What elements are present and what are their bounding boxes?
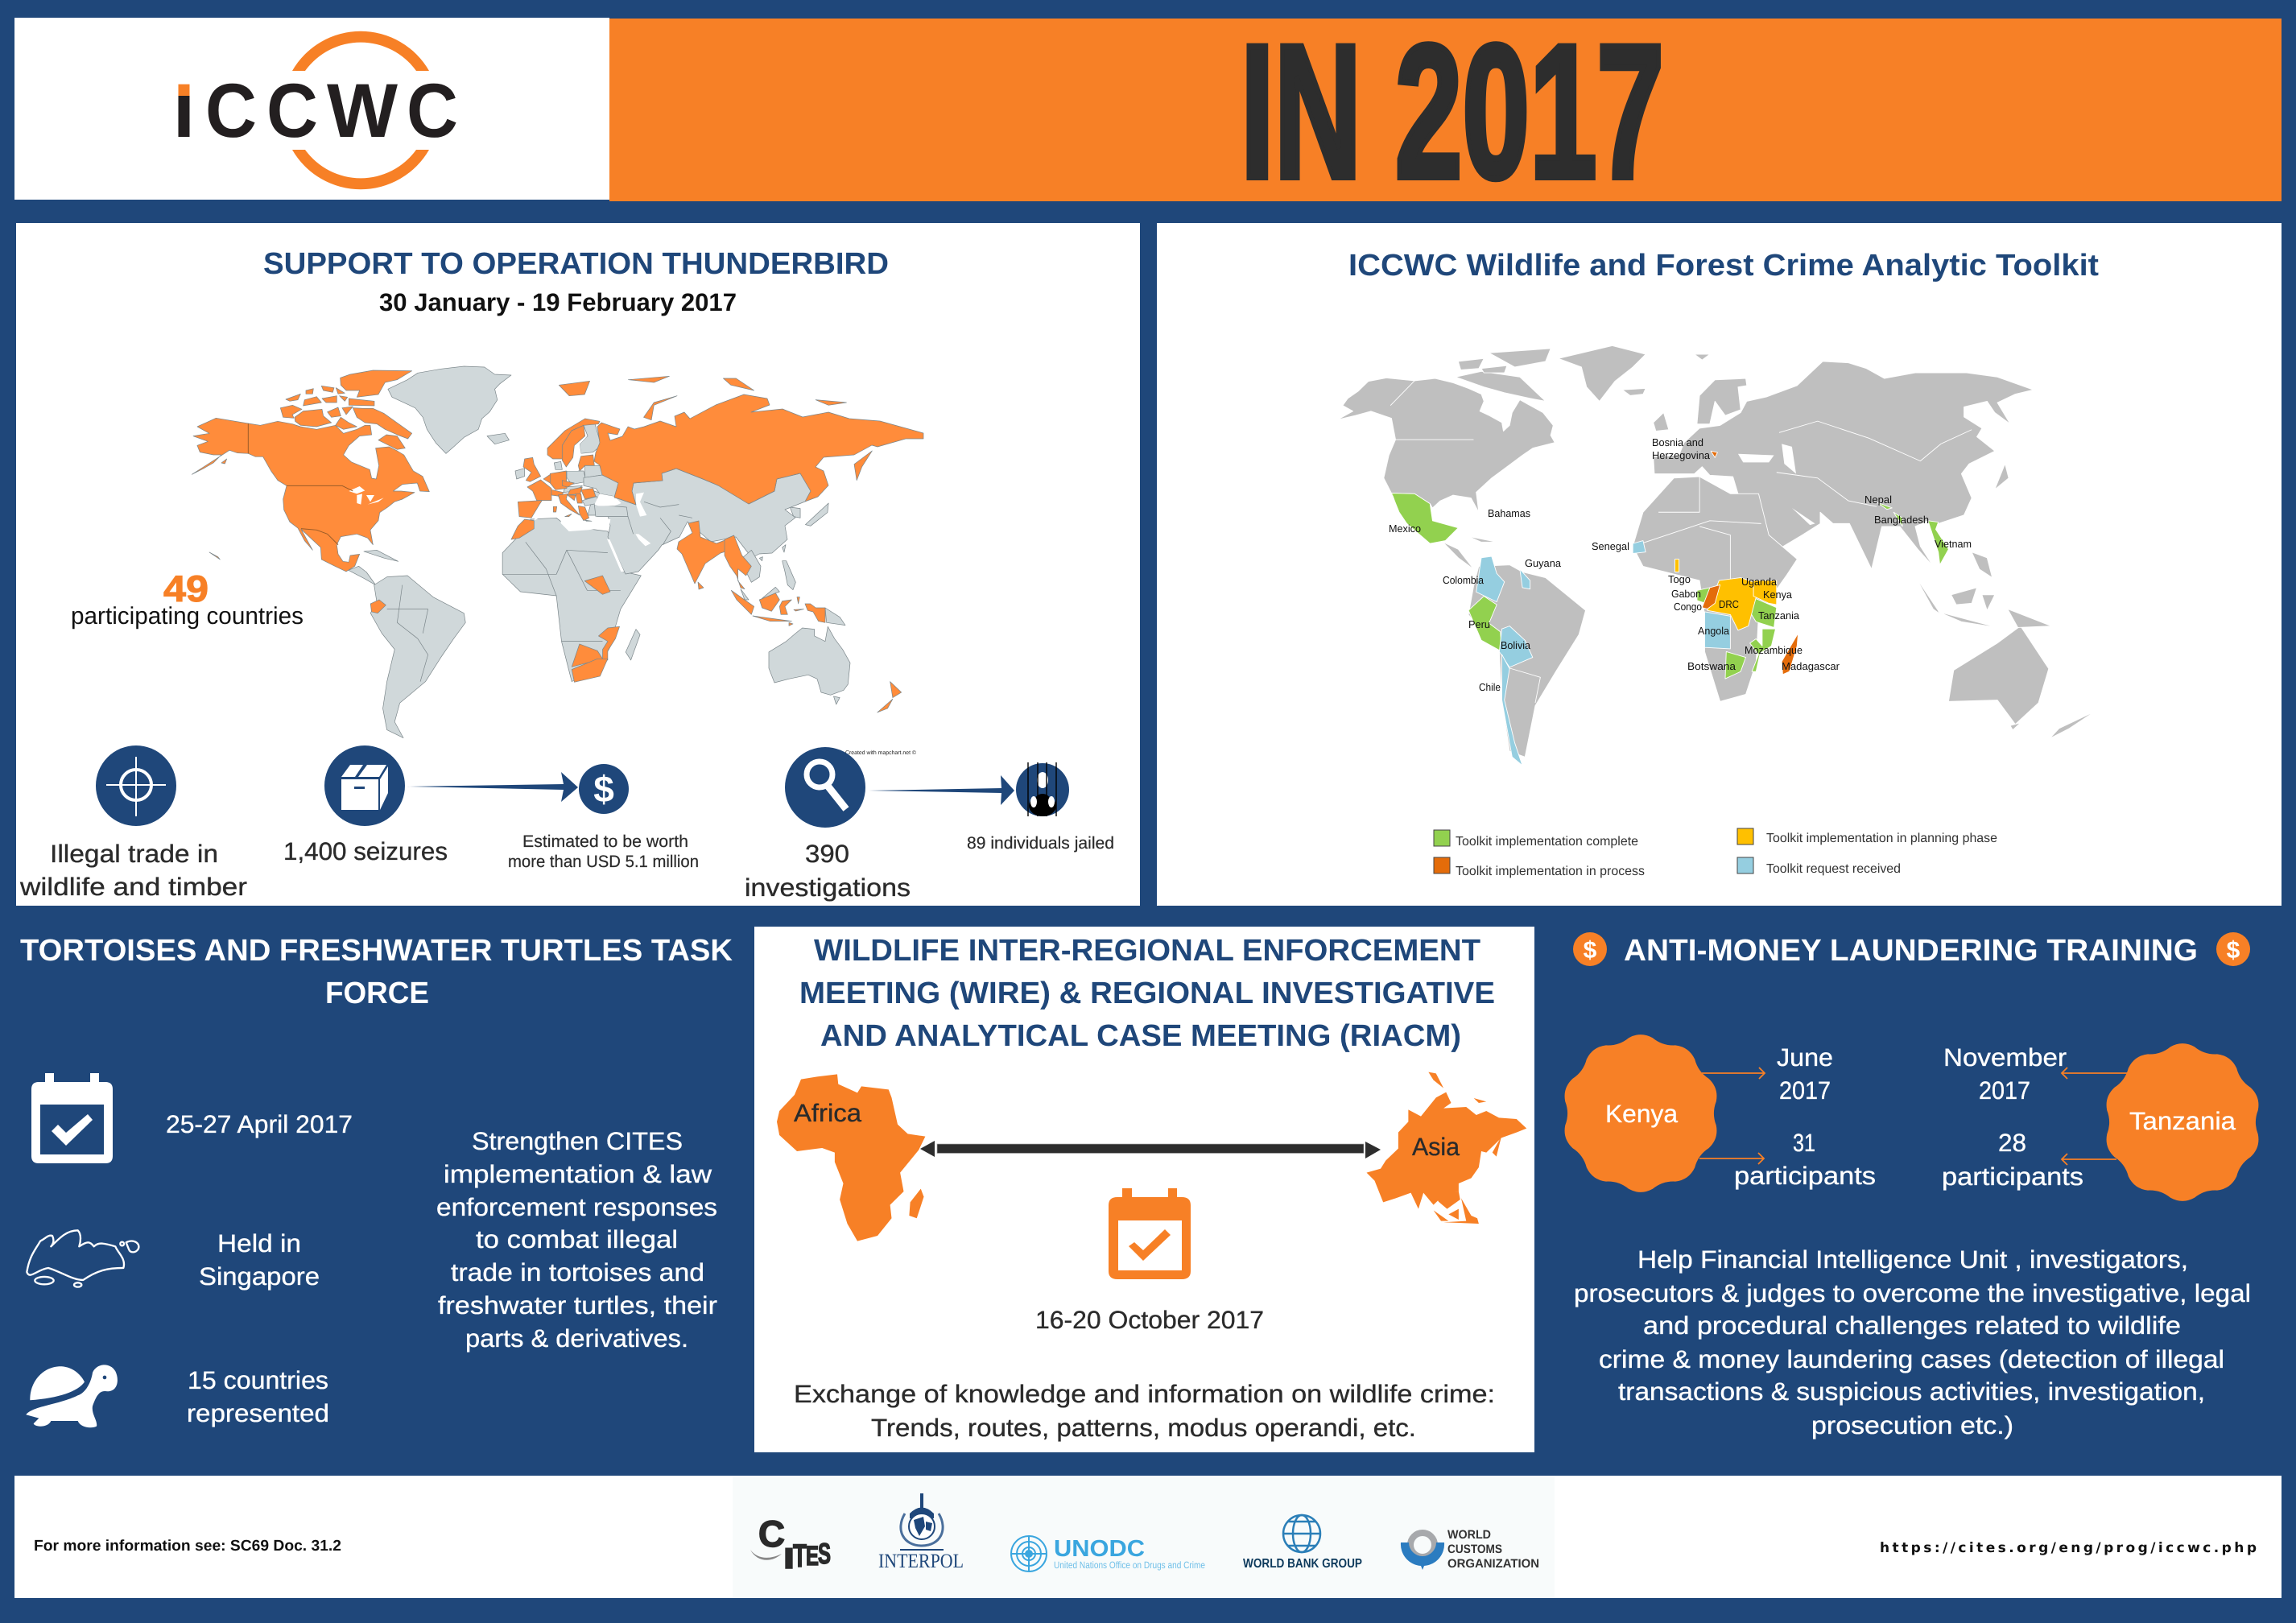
arrows: tanzania	[2062, 1068, 2127, 1165]
map legend	[1434, 828, 1997, 878]
country labels: DRC	[1719, 598, 1739, 610]
operation dates: 30 January - 19 February 2017	[379, 288, 737, 316]
country labels: Vietnam	[1935, 538, 1972, 550]
label: investigations	[745, 840, 911, 902]
wire description	[794, 1380, 1495, 1442]
double arrow	[920, 1141, 1381, 1158]
map: asia	[1367, 1072, 1526, 1224]
heading: aml: ANTI-MONEY LAUNDERING TRAINING	[1624, 934, 2198, 968]
icon: dollar	[579, 764, 629, 814]
kenya details: 31	[1793, 1129, 1815, 1157]
panel: operation thunderbird	[16, 223, 1140, 906]
stat: 49 participating countries: participating countries	[71, 603, 304, 630]
countries text: 15 countries	[188, 1366, 328, 1394]
label: asia: Asia	[1412, 1133, 1460, 1161]
panel: tortoises task force	[20, 934, 733, 1427]
icon: magnifier	[785, 747, 865, 828]
logo wordmark: C	[407, 68, 458, 154]
logo wordmark	[173, 68, 458, 154]
tanzania details: November	[1943, 1043, 2067, 1072]
icon: singapore	[27, 1230, 138, 1287]
strengthen paragraph: enforcement responses	[436, 1193, 717, 1221]
logo: cites: S	[818, 1537, 831, 1570]
strengthen paragraph: implementation & law	[444, 1160, 712, 1188]
heading: wire: MEETING (WIRE) & REGIONAL INVESTIGATIVE	[799, 977, 1495, 1010]
country labels: Senegal	[1592, 540, 1629, 552]
country labels: Botswana	[1687, 660, 1736, 672]
logo: world customs organization: WORLD	[1447, 1528, 1491, 1542]
country labels: Bosnia and	[1652, 436, 1703, 448]
strengthen paragraph	[436, 1127, 717, 1352]
country labels: Gabon	[1671, 588, 1701, 600]
kenya details: June	[1777, 1043, 1833, 1072]
country labels: Colombia	[1443, 574, 1485, 586]
label: jailed: 89 individuals jailed	[967, 834, 1114, 853]
icon: dollar: $	[593, 768, 614, 810]
icon: box seizure	[324, 745, 405, 826]
date: wire: 16-20 October 2017	[1035, 1306, 1264, 1334]
logo wordmark: C	[205, 68, 257, 154]
heading: task force: TORTOISES AND FRESHWATER TURTLES TASK	[20, 934, 733, 968]
icon: calendar	[31, 1073, 113, 1163]
world map: participating countries	[192, 366, 923, 738]
aml paragraph: crime & money laundering cases (detection of illegal	[1599, 1345, 2224, 1373]
logo: cites: T	[793, 1538, 807, 1574]
heading: wire	[799, 934, 1495, 1053]
arrow: investigations to jailed	[869, 775, 1014, 805]
label: investigations: investigations	[745, 873, 911, 902]
badge: kenya: Kenya	[1605, 1100, 1679, 1128]
heading: wire: AND ANALYTICAL CASE MEETING (RIACM)	[820, 1019, 1461, 1053]
heading: wire: WILDLIFE INTER-REGIONAL ENFORCEMENT	[814, 934, 1480, 968]
aml paragraph: prosecution etc.)	[1811, 1411, 2013, 1439]
aml paragraph: transactions & suspicious activities, investigation,	[1618, 1377, 2205, 1406]
country labels: Herzegovina	[1652, 449, 1711, 461]
map legend: Toolkit implementation complete	[1456, 835, 1638, 849]
aml paragraph: prosecutors & judges to overcome the investigative, legal	[1574, 1279, 2251, 1307]
heading: task force	[20, 934, 733, 1010]
country labels: Bolivia	[1501, 639, 1531, 651]
aml paragraph: Help Financial Intelligence Unit , investigators,	[1637, 1245, 2188, 1274]
country labels: Peru	[1468, 618, 1490, 630]
logo: world customs organization: ORGANIZATION	[1447, 1557, 1539, 1571]
strengthen paragraph: parts & derivatives.	[465, 1324, 688, 1352]
label: estimated worth: more than USD 5.1 million	[508, 853, 699, 871]
icon: orange calendar	[1109, 1188, 1191, 1279]
footer note: For more information see: SC69 Doc. 31.2	[34, 1538, 341, 1555]
wire description: Trends, routes, patterns, modus operandi, etc.	[871, 1414, 1416, 1442]
kenya details	[1734, 1043, 1876, 1190]
country labels: Mexico	[1389, 522, 1421, 535]
countries text: represented	[187, 1399, 329, 1427]
stat: 49 participating countries	[71, 568, 304, 630]
logo: unodc	[1011, 1536, 1205, 1571]
country labels: Bahamas	[1488, 507, 1530, 519]
arrow: seizures to value	[407, 772, 578, 802]
logo: world bank	[1243, 1515, 1362, 1571]
logo: world bank: WORLD BANK GROUP	[1243, 1557, 1362, 1571]
icon: turtle	[26, 1365, 118, 1427]
icon: crosshair	[96, 745, 176, 826]
logo: world customs organization: CUSTOMS	[1447, 1542, 1502, 1556]
label: estimated worth	[508, 832, 699, 871]
logo wordmark: I	[173, 68, 195, 154]
tanzania details: 28	[1998, 1129, 2026, 1157]
map credit: Created with mapchart.net ©	[845, 750, 917, 756]
country labels	[1389, 436, 1972, 693]
map legend: Toolkit implementation in process	[1456, 865, 1645, 878]
label: estimated worth: Estimated to be worth	[522, 832, 688, 851]
logo ring	[292, 31, 429, 189]
country labels: Angola	[1698, 625, 1730, 637]
location text	[199, 1229, 320, 1291]
badge: tanzania	[2107, 1043, 2258, 1201]
footer panel	[14, 1476, 2282, 1598]
country labels: Nepal	[1864, 494, 1892, 506]
map legend: Toolkit implementation in planning phase	[1766, 832, 1997, 845]
stat: 49 participating countries: 49	[163, 568, 209, 609]
location text: Singapore	[199, 1262, 320, 1291]
country labels: Tanzania	[1758, 609, 1800, 622]
label: investigations: 390	[805, 840, 849, 868]
title banner	[609, 6, 2282, 218]
label: illegal trade: Illegal trade in	[50, 840, 218, 868]
strengthen paragraph: Strengthen CITES	[472, 1127, 683, 1155]
panel: anti-money laundering	[1565, 932, 2258, 1439]
kenya details: 2017	[1779, 1076, 1831, 1105]
icon: jailed person	[1016, 762, 1069, 816]
wire description: Exchange of knowledge and information on wildlife crime:	[794, 1380, 1495, 1408]
location text: Held in	[217, 1229, 301, 1258]
logo: interpol: INTERPOL	[878, 1551, 964, 1572]
icon: dollar left: $	[1584, 937, 1597, 964]
country labels: Uganda	[1741, 576, 1778, 588]
logo: cites	[750, 1513, 831, 1575]
logo: world customs organization	[1401, 1528, 1539, 1571]
strengthen paragraph: freshwater turtles, their	[438, 1291, 717, 1319]
icon: dollar left	[1573, 932, 1607, 966]
country labels: Bangladesh	[1874, 514, 1929, 526]
strengthen paragraph: trade in tortoises and	[451, 1258, 704, 1286]
label: africa: Africa	[794, 1099, 862, 1127]
label: seizures: 1,400 seizures	[283, 837, 448, 865]
country labels: Chile	[1479, 681, 1501, 693]
heading: toolkit: ICCWC Wildlife and Forest Crime Analytic Toolkit	[1348, 249, 2099, 283]
aml paragraph	[1574, 1245, 2251, 1439]
heading: task force: FORCE	[325, 977, 429, 1010]
country labels: Togo	[1668, 573, 1691, 585]
map: africa	[777, 1074, 925, 1241]
logo panel	[14, 18, 609, 200]
strengthen paragraph: to combat illegal	[476, 1225, 678, 1253]
logo: interpol	[878, 1493, 964, 1572]
country labels: Mozambique	[1745, 644, 1803, 656]
tanzania details: participants	[1942, 1163, 2083, 1191]
label: illegal trade	[19, 840, 247, 901]
logo: unodc: UNODC	[1054, 1536, 1145, 1562]
countries text	[187, 1366, 329, 1427]
logo: unodc: United Nations Office on Drugs and Crime	[1054, 1559, 1205, 1571]
tanzania details	[1942, 1043, 2083, 1191]
country labels: Kenya	[1763, 588, 1793, 601]
icon: dollar right: $	[2227, 937, 2240, 964]
aml paragraph: and procedural challenges related to wildlife	[1643, 1311, 2181, 1340]
kenya details: participants	[1734, 1162, 1876, 1190]
logo: cites: E	[806, 1541, 819, 1571]
logo wordmark: C	[266, 68, 318, 154]
footer url: https://cites.org/eng/prog/iccwc.php	[1880, 1540, 2257, 1556]
label: illegal trade: wildlife and timber	[19, 873, 247, 901]
heading: thunderbird: SUPPORT TO OPERATION THUNDERBIRD	[263, 247, 889, 281]
country labels: Madagascar	[1782, 660, 1840, 672]
arrows: kenya	[1699, 1068, 1765, 1164]
tanzania details: 2017	[1979, 1076, 2030, 1105]
title banner: IN 2017	[1241, 6, 1664, 218]
country labels: Guyana	[1525, 557, 1562, 569]
world map: toolkit status	[1337, 345, 2095, 766]
panel: wire meeting	[754, 927, 1534, 1452]
logo: cites: I	[783, 1542, 795, 1575]
logo wordmark: W	[327, 68, 398, 154]
logo: cites: C	[758, 1513, 785, 1555]
badge: kenya	[1565, 1035, 1716, 1192]
panel: analytic toolkit	[1157, 223, 2282, 906]
country labels: Congo	[1674, 601, 1702, 613]
map legend: Toolkit request received	[1766, 862, 1901, 876]
date text: 25-27 April 2017	[166, 1110, 353, 1138]
icon: dollar right	[2216, 932, 2250, 966]
badge: tanzania: Tanzania	[2129, 1107, 2236, 1135]
